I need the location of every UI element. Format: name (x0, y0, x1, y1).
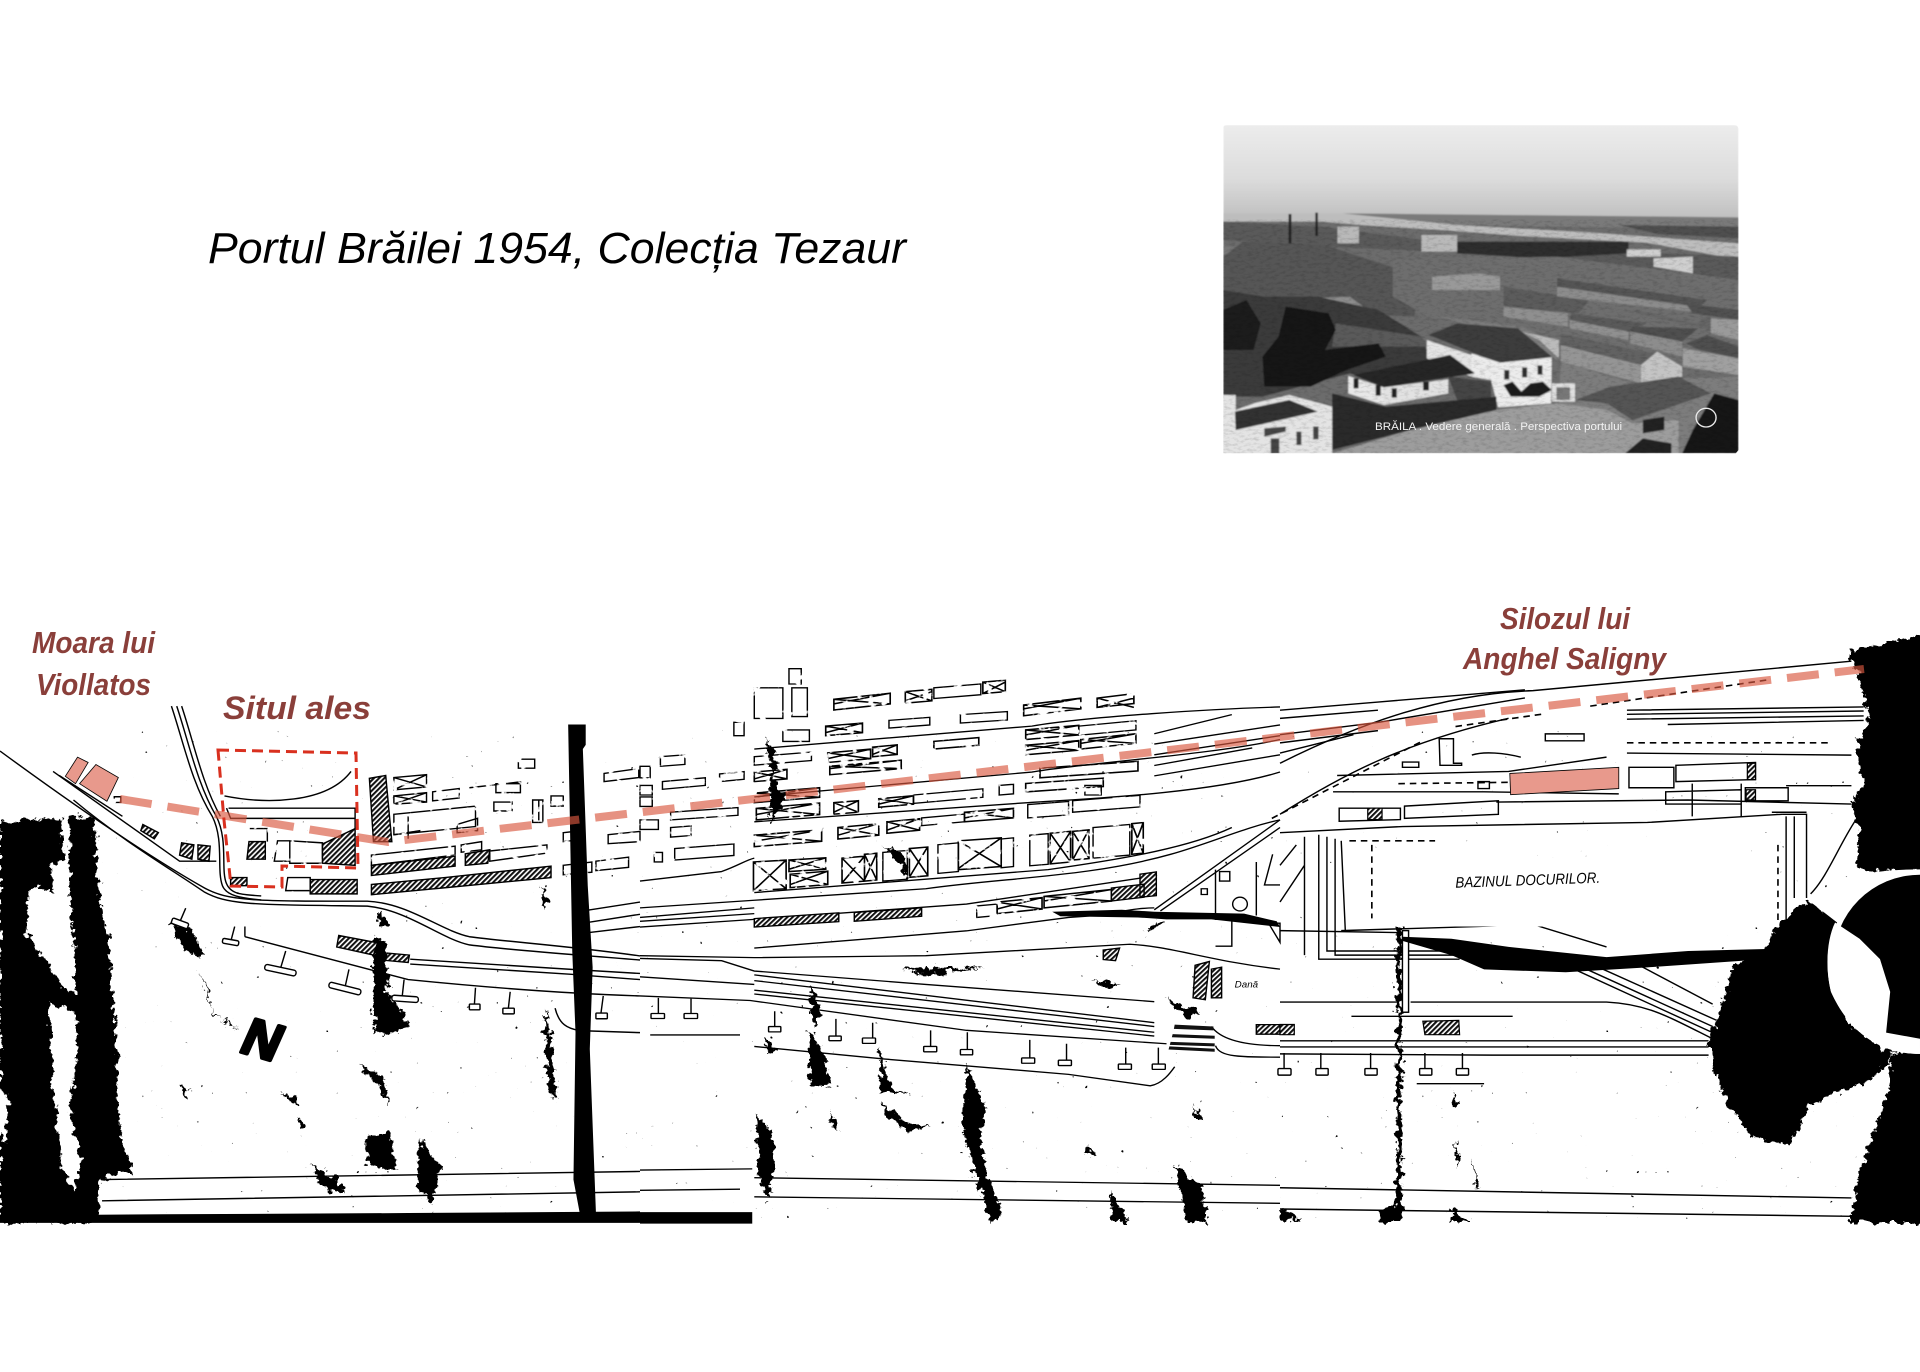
west stains and drips (169, 886, 557, 1204)
salmon building: Silozul lui Anghel Saligny (1510, 767, 1619, 795)
label: Dană: Dană (1235, 980, 1258, 990)
port office block (1201, 854, 1280, 946)
west rail lines (0, 706, 640, 1201)
label: Silozul lui Anghel Saligny: Anghel Saligny (1462, 641, 1668, 676)
east dashes along docks (1272, 680, 1831, 927)
east black edge (1849, 633, 1920, 1222)
map section: east (1272, 633, 1920, 1222)
east vertical streak (1280, 927, 1480, 1222)
photo: historic postcard of the port (1223, 125, 1739, 453)
centre bottom black band (640, 1212, 752, 1224)
centre X-marked warehouses (753, 680, 1143, 914)
map specks (100, 730, 1860, 1220)
label: Moara lui Viollatos: Viollatos (36, 667, 151, 702)
label: Silozul lui Anghel Saligny: Silozul lui (1500, 601, 1631, 636)
centre ink stains (756, 736, 1207, 1222)
label north arrow: N: N (232, 1008, 293, 1073)
map section: west (0, 706, 640, 1223)
dark streak along quay (1052, 910, 1280, 927)
central black bar (568, 724, 596, 1212)
dock ink band (1402, 937, 1766, 972)
site boundary: Situl ales (218, 750, 358, 887)
centre plain warehouses (640, 669, 1140, 917)
label: Bazinul Docurilor: BAZINUL DOCURILOR. (1455, 870, 1600, 892)
east piers (1278, 931, 1469, 1075)
centre piers (651, 998, 1165, 1069)
bottom black band (0, 1211, 640, 1223)
west hatched buildings (141, 776, 551, 962)
seal circle (1811, 869, 1920, 1054)
stair quay (1169, 1025, 1215, 1052)
map section: centre (640, 669, 1280, 1224)
west ink stains (0, 816, 135, 1222)
east hatched parts (1280, 763, 1756, 1035)
east rail lines (1280, 661, 1864, 1216)
centre rail lines (640, 707, 1280, 1203)
salmon mill buildings: Moara lui Viollatos (65, 757, 118, 801)
label: Moara lui Viollatos (32, 625, 156, 702)
map: port plan 1954 (0, 633, 1920, 1224)
dock white area (1378, 857, 1770, 927)
west plain buildings (114, 759, 640, 891)
label: Silozul lui Anghel Saligny (1462, 601, 1668, 676)
west piers (171, 908, 607, 1019)
east ink blob (1709, 902, 1892, 1145)
east buildings (1339, 734, 1788, 821)
salmon route dashed line (120, 669, 1864, 842)
label: Moara lui Viollatos: Moara lui (32, 625, 156, 660)
centre hatched warehouses (754, 872, 1280, 1034)
label: Situl ales: Situl ales (223, 690, 371, 726)
title: Portul Brăilei 1954, Colecția Tezaur (208, 224, 908, 273)
photo caption: BRĂILA . Vedere generală . Perspectiva portului (1375, 420, 1622, 433)
